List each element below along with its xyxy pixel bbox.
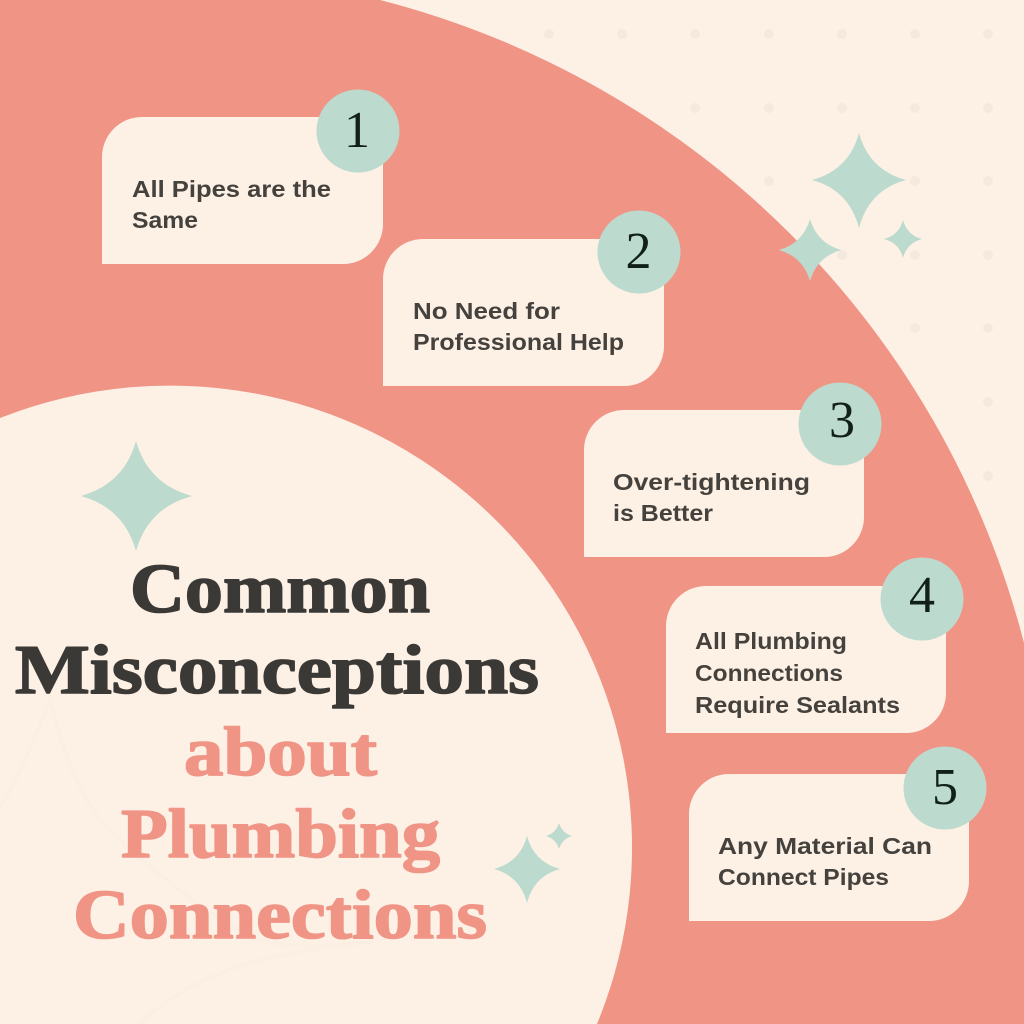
- icon: sparkles near title: [494, 823, 572, 903]
- card 2: No Need for Professional Help: No Need for: [413, 298, 560, 324]
- card 4: All Plumbing Connections Require Sealants: Connections: [695, 660, 843, 686]
- icon: sparkles top right: [779, 133, 922, 281]
- card 1: All Pipes are the Same: All Pipes are the: [132, 176, 331, 202]
- card 3: Over-tightening is Better: Over-tightening: [613, 469, 810, 495]
- card 2: No Need for Professional Help: [383, 210, 680, 386]
- card 5: Any Material Can Connect Pipes: Connect Pipes: [718, 864, 889, 890]
- title: Connections: [73, 877, 487, 954]
- card 4: All Plumbing Connections Require Sealants: [666, 558, 964, 733]
- card 4: All Plumbing Connections Require Sealants: All Plumbing: [695, 628, 847, 654]
- title: Misconceptions: [15, 632, 539, 709]
- card 3: Over-tightening is Better: 3: [829, 392, 855, 449]
- card 5: Any Material Can Connect Pipes: Any Material Can: [718, 833, 932, 859]
- title: Common: [130, 551, 430, 628]
- card 1: All Pipes are the Same: [102, 90, 400, 264]
- dot pattern background: [544, 29, 993, 481]
- card 4: All Plumbing Connections Require Sealants: 4: [909, 567, 935, 624]
- title: Plumbing: [121, 796, 440, 873]
- cream circle panel: [0, 386, 632, 1024]
- card 2: No Need for Professional Help: 2: [626, 223, 652, 280]
- card 1: All Pipes are the Same: Same: [132, 207, 198, 233]
- title: [15, 551, 539, 954]
- card 4: All Plumbing Connections Require Sealants: Require Sealants: [695, 692, 900, 718]
- card 1: All Pipes are the Same: 1: [344, 102, 370, 159]
- card 2: No Need for Professional Help: Professional Help: [413, 329, 624, 355]
- card 3: Over-tightening is Better: is Better: [613, 500, 713, 526]
- card 3: Over-tightening is Better: [584, 382, 882, 557]
- card 5: Any Material Can Connect Pipes: [689, 746, 986, 921]
- title: about: [184, 714, 377, 791]
- card 5: Any Material Can Connect Pipes: 5: [932, 759, 958, 816]
- icon: sparkle above title: [81, 441, 192, 551]
